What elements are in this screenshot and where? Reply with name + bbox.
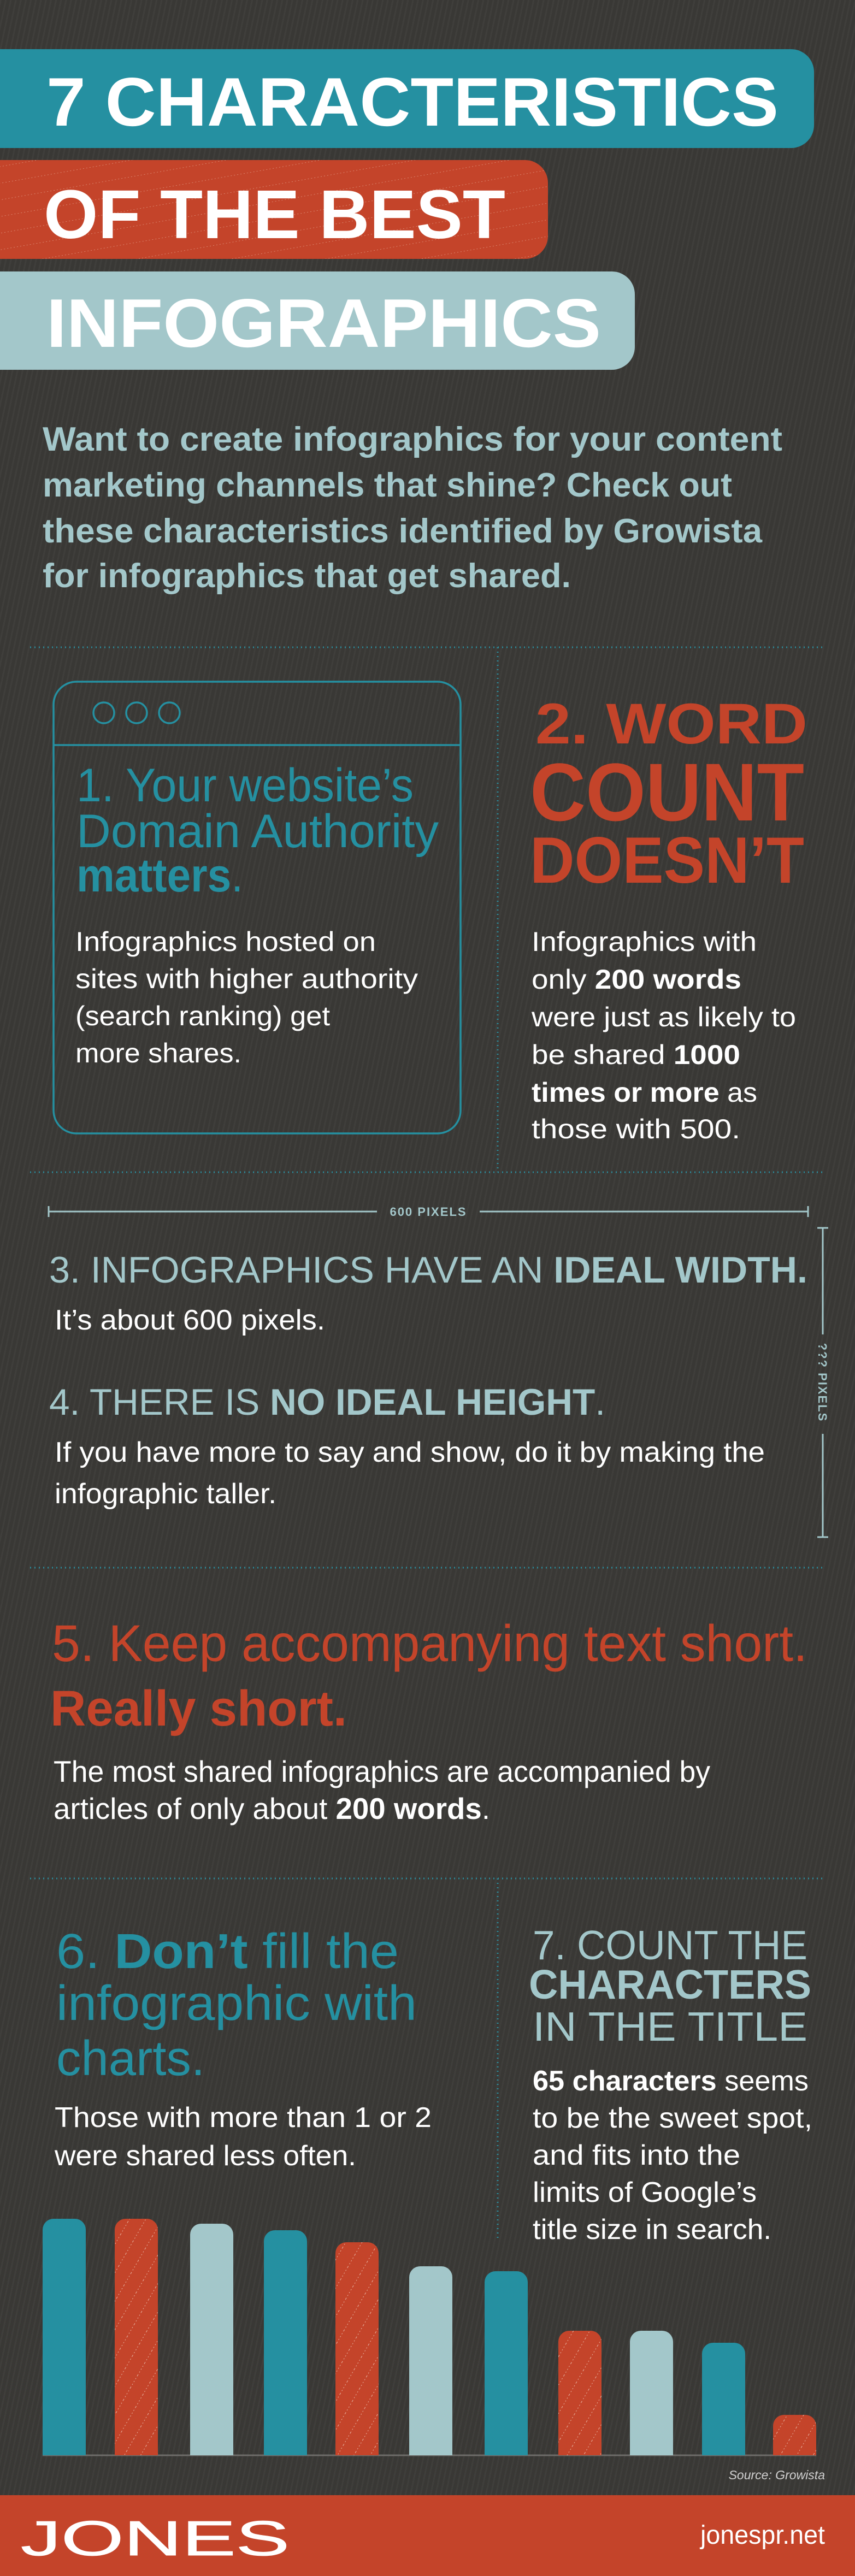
heading 2: COUNT bbox=[530, 746, 804, 838]
source note: Source: Growista bbox=[729, 2468, 825, 2482]
intro paragraph: Want to create infographics for your content bbox=[43, 421, 782, 458]
section 7: count title characters: title size in search. bbox=[533, 2214, 771, 2246]
section 4: no ideal height: infographic taller. bbox=[55, 1478, 276, 1510]
body 2: times or more as bbox=[532, 1077, 757, 1108]
heading 1: matters. bbox=[76, 849, 243, 902]
section 6: don't fill with charts: were shared less often. bbox=[54, 2140, 356, 2172]
section 7: count title characters: and fits into the bbox=[533, 2140, 740, 2171]
section 3: ideal width bbox=[49, 1249, 807, 1336]
heading 2 bbox=[530, 692, 807, 897]
title banner: infographics: INFOGRAPHICS bbox=[46, 285, 601, 362]
title banner: infographics bbox=[0, 271, 635, 370]
title banner: of the best bbox=[0, 160, 548, 259]
section 4: no ideal height: 4. THERE IS NO IDEAL HEIGHT. bbox=[49, 1381, 605, 1423]
intro paragraph: marketing channels that shine? Check out bbox=[43, 466, 732, 504]
section 7: count title characters: 65 characters seems bbox=[533, 2065, 809, 2097]
body 1: more shares. bbox=[75, 1038, 241, 1068]
section 6: don't fill with charts: charts. bbox=[56, 2031, 205, 2086]
heading 2: 2. WORD bbox=[535, 692, 807, 756]
intro paragraph: these characteristics identified by Growista bbox=[43, 512, 763, 550]
width ruler: 600 pixels: 600 PIXELS bbox=[390, 1205, 467, 1219]
icon: browser window bbox=[54, 682, 461, 1133]
section 6: don't fill with charts: 6. Don’t fill the bbox=[56, 1924, 399, 1979]
section 5: keep text short: 5. Keep accompanying text short. bbox=[52, 1615, 807, 1673]
section 7: count title characters: CHARACTERS bbox=[529, 1961, 811, 2007]
section 7: count title characters bbox=[529, 1922, 812, 2246]
section 7: count title characters: IN THE TITLE bbox=[533, 2004, 807, 2049]
body 2: only 200 words bbox=[532, 964, 741, 995]
footer bbox=[0, 2495, 855, 2576]
intro paragraph: for infographics that get shared. bbox=[43, 557, 571, 595]
section 6: don't fill with charts: infographic with bbox=[56, 1976, 417, 2031]
bar chart bbox=[43, 2219, 816, 2455]
heading 1: Domain Authority bbox=[76, 805, 439, 858]
body 2: those with 500. bbox=[532, 1114, 740, 1144]
title banner: 7 characteristics bbox=[0, 49, 814, 148]
section 7: count title characters: to be the sweet spot, bbox=[533, 2102, 812, 2134]
panel 2: word count bbox=[530, 692, 807, 1144]
footer url: jonespr.net bbox=[699, 2521, 825, 2550]
body 1 bbox=[75, 926, 418, 1068]
section 7: count title characters: 7. COUNT THE bbox=[533, 1922, 807, 1968]
section 5: keep text short: The most shared infographics are accompanied by bbox=[54, 1754, 710, 1788]
section 3: ideal width: It’s about 600 pixels. bbox=[55, 1304, 325, 1336]
title banner: 7 characteristics: 7 CHARACTERISTICS bbox=[46, 63, 779, 140]
section 7: count title characters: limits of Google’s bbox=[533, 2177, 757, 2208]
heading 1: 1. Your website’s bbox=[76, 759, 414, 812]
heading 2: DOESN’T bbox=[530, 824, 804, 897]
panel 1: domain authority (browser window) bbox=[54, 682, 461, 1133]
body 2: be shared 1000 bbox=[532, 1039, 740, 1070]
section 5: keep text short: Really short. bbox=[50, 1681, 347, 1736]
body 1: sites with higher authority bbox=[75, 964, 418, 994]
section 5: keep text short bbox=[50, 1615, 807, 1825]
section 4: no ideal height: If you have more to say and show, do it by making the bbox=[55, 1437, 765, 1468]
section 6: don't fill with charts: Those with more than 1 or 2 bbox=[55, 2102, 432, 2134]
heading 1 bbox=[76, 759, 439, 902]
body 1: (search ranking) get bbox=[75, 1001, 330, 1031]
body 1: Infographics hosted on bbox=[75, 926, 376, 957]
section 6: don't fill with charts bbox=[54, 1924, 432, 2172]
logo: JONES: JONES bbox=[21, 2512, 290, 2566]
body 2 bbox=[531, 926, 796, 1144]
body 2: were just as likely to bbox=[531, 1002, 796, 1032]
section 4: no ideal height bbox=[49, 1381, 765, 1510]
intro paragraph bbox=[43, 421, 782, 595]
height ruler: ??? pixels: ??? PIXELS bbox=[816, 1343, 829, 1422]
title banner: of the best: OF THE BEST bbox=[44, 176, 505, 253]
section 3: ideal width: 3. INFOGRAPHICS HAVE AN IDEAL WIDTH. bbox=[49, 1249, 807, 1291]
section 5: keep text short: articles of only about 200 words. bbox=[54, 1792, 490, 1825]
body 2: Infographics with bbox=[532, 926, 757, 957]
